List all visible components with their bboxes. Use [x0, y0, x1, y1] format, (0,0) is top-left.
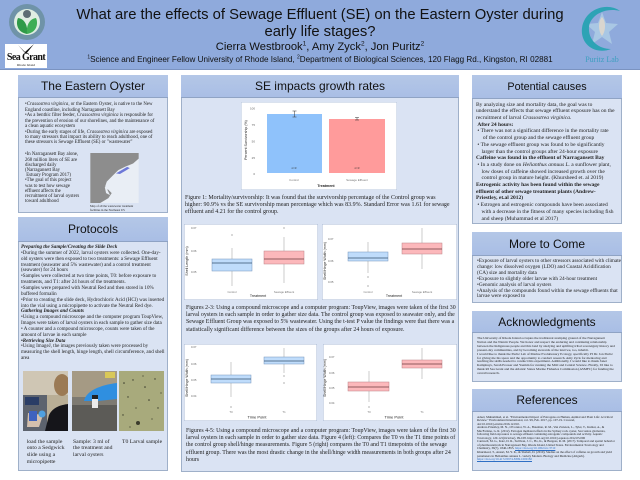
text block: oyster background: a clean aquatic ecosystem	[25, 124, 75, 129]
text block: references: Khursheed, T., Ansari, M. Y. K., & Shahab, D. (2019). Studies on the effect of caffeine on growth and yield	[477, 450, 612, 454]
text block: protocol steps: into the vial using a micropipette to activate the Neutral Red dye.	[21, 303, 153, 309]
caption: figure 1	[185, 194, 450, 214]
caption: figures 2-3: statistically significant difference between the sizes of the groups after 24 hours of exposure.	[186, 327, 404, 333]
text block: acknowledgments: for giving me his space and the opportunity to conduct research. Amy Zyck for mentoring and	[477, 356, 606, 360]
box plot: control group T0 vs T1: Time Point	[248, 414, 267, 420]
box plot: shell hinge width by treatment	[322, 224, 457, 300]
text block: references: doi:10.1016/j.envint.2016.12.010.	[477, 422, 520, 426]
text block: protocol steps: area	[21, 355, 29, 361]
heading: Potential causes	[472, 75, 622, 99]
text block: protocol steps: •Using ImageJ, the images previously taken were processed by	[21, 343, 148, 349]
photo caption: sample	[73, 438, 112, 458]
text block: future work: change: low dissolved oxygen (LDO) and Coastal Acidification	[477, 264, 611, 270]
icon: Sea Grant logo: Rhode Island	[17, 63, 35, 67]
text block: references: of pharmaceuticals in Narragansett Bay, Rhode Island, United States. Environmental Toxicology and	[477, 443, 604, 447]
text block: oyster background: •Crassostrea virginica, or the Eastern Oyster, is native to the New	[25, 102, 152, 107]
text block: potential causes: and sheep (Muhammad et al 2017)	[482, 216, 558, 222]
text block: references: https://doi.org/10.4172/0974-8369.1000182	[477, 457, 532, 461]
heading: Acknowledgments	[472, 311, 622, 333]
caption: figures 4-5: effluent group. There was the most drastic change in the shell/hinge width measurements in both groups after 24	[186, 450, 451, 456]
caption: figures 4-5: Figures 4-5: Using a compound microscope and a computer program: ToupView, images were taken of the first 30	[186, 428, 456, 434]
text block: oyster background: the prevention of erosion of our shorelines, and the maintenance of	[25, 119, 154, 124]
text block: references: MacFarlane, G. R. (2012). Estrogen mediated effects in the Sydney rock oyster, Saccostrea glomerata,	[477, 429, 605, 433]
box plot: control group T0 vs T1: 0.06	[191, 362, 197, 366]
box plot: sewage effluent group T0 vs T1: 0.05	[329, 386, 335, 390]
box plot: shell length by treatment: 0.06	[191, 249, 197, 253]
text block: future work: (CA) size and mortality data	[477, 270, 537, 276]
map: wastewater treatment facilities	[90, 153, 139, 203]
caption: figures 2-3: Sewage Effluent Group was exposed to 5% wastewater. Using the t-test P value the findings were that there was a	[186, 319, 454, 325]
box plot: shell length by treatment: 0.07	[191, 226, 197, 230]
text block: protocol steps: buffered formalin	[21, 291, 57, 297]
icon: Sea Grant logo	[5, 44, 47, 68]
bar chart: percent survivorship: Sewage Effluent	[346, 178, 368, 182]
bar chart: percent survivorship: 0	[253, 172, 255, 176]
caption: figures 4-5: larval oysters in each sample in order to gather size data. Figure 4 (left): Compares the T0 vs the T1 time points of	[186, 435, 455, 441]
photo caption: T0 larval sample: T0 Larval sample	[122, 438, 162, 444]
text block: potential causes: Estrogenic activity has been found within the sewage	[476, 182, 600, 188]
text block: protocol steps: (seawater) for 24 hours	[21, 267, 68, 273]
box plot: shell length by treatment: Control	[227, 290, 237, 294]
text block: future work: •Analysis of the compounds found within the sewage effluents that	[477, 288, 618, 294]
box plot: shell hinge width by treatment: Control	[363, 290, 373, 294]
text block: potential causes: • The sewage effluent group was found to be significantly	[477, 142, 604, 148]
box plot: control group T0 vs T1: Shell/Hinge Width (mm)	[185, 359, 189, 397]
text block: potential causes: After 24 hours:	[477, 122, 513, 128]
text block: Narragansett Bay and goal: 268 million liters of SE are	[25, 158, 77, 163]
photo caption: sample: the treatment and	[73, 445, 112, 451]
text block: protocol steps: •Prior to creating the slide deck, Hydrochloric Acid (HCl) was inserted	[21, 297, 164, 303]
title: What are the effects of Sewage Effluent (SE) on the Eastern Oyster during	[76, 7, 564, 23]
map caption: Map of all the wastewater treatment	[90, 204, 133, 208]
affiliations: 1Science and Engineer Fellow University of Rhode Island, 2Department of Biological Sciences, 120 Flagg Rd., Kingston, RI 02881	[87, 54, 553, 64]
text block: references: following field exposures to sewage effluent containing estrogenic compounds and activity. Aquatic	[477, 432, 603, 436]
panel: The Eastern Oyster	[18, 75, 168, 213]
text block: Narragansett Bay and goal: effluent affects the	[25, 189, 61, 194]
text block: protocol steps	[21, 244, 165, 361]
bar chart: percent survivorship: Percent Survivorship (%)	[244, 120, 248, 160]
text block: protocol steps: old oysters were then exposed to two treatments: a Sewage Effluent	[21, 256, 158, 262]
box plot: sewage effluent group T0 vs T1: 0.04	[329, 401, 335, 405]
title: early life stages?	[264, 24, 376, 40]
heading: Protocols: Protocols	[68, 222, 118, 236]
photo: loading the sample	[23, 371, 68, 431]
text block: Narragansett Bay and goal: recruitment of larval oysters	[25, 194, 79, 199]
photo caption: load the sample: load the sample	[27, 438, 62, 444]
box plot: control group T0 vs T1: T0	[229, 410, 233, 414]
caption: figures 2-3: Figures 2-3: Using a compound microscope and a computer program: ToupView, images were taken of the first 30	[186, 304, 456, 310]
text block: future work: larvae were exposed to	[477, 293, 525, 299]
text block: protocol steps: •Using a compound microscope and the computer program ToupView,	[21, 314, 163, 320]
icon: Puritz Lab logo	[582, 6, 620, 64]
icon: Sea Grant logo: Sea Grant	[7, 52, 45, 63]
caption: figures 4-5: the control group shell/hinge measurements. Figure 5 (right) compares the T0 and T1 timepoints of the sewage	[186, 442, 447, 448]
box plot: control group T0 vs T1: 0.07	[191, 345, 197, 349]
box plot: control group T0 vs T1: T1	[282, 410, 286, 414]
text block: protocol steps: • A counter and a compound microscope, counts were taken of the	[21, 326, 155, 332]
box plot: sewage effluent group T0 vs T1: Time Point	[385, 414, 404, 420]
caption: figures 2-3	[186, 304, 456, 333]
text block: Narragansett Bay and goal: •In Narragansett Bay alone,	[25, 152, 78, 157]
text block: potential causes: • Estrogen and estrogenic compounds have been associated	[477, 202, 608, 208]
bar chart: percent survivorship: n=3	[355, 166, 360, 170]
text block: oyster background: •As a benthic filter feeder, Crassostrea virginica is responsible for	[25, 113, 153, 118]
text block: protocol steps: Gathering Images and Counts	[21, 308, 84, 314]
bar chart: percent survivorship: n=3	[292, 166, 297, 170]
bar chart: percent survivorship: 50	[252, 140, 255, 144]
text block: potential causes: control group in mature height. (Khursheed et. al 2019)	[482, 175, 603, 181]
text block: potential causes: • In a study done on Helianthus annuus L. a sunflower plant,	[477, 162, 611, 168]
text block: acknowledgments: Nation and the Niantic People. We honor and respect the enduring and continuing relationship	[477, 340, 606, 344]
heading: Acknowledgments: Acknowledgments	[498, 315, 596, 329]
box plot: shell length by treatment: 0.05	[191, 270, 197, 274]
box plot: sewage effluent group T0 vs T1	[323, 344, 457, 421]
panel: Protocols	[18, 217, 168, 471]
box plot: shell hinge width by treatment: 0.07	[328, 237, 334, 241]
text block: Narragansett Bay and goal: was to test how sewage	[25, 184, 70, 189]
text block: protocol steps: Images were taken of larval oysters in each sample to gather size data	[21, 320, 162, 326]
icon: green program logo	[9, 4, 45, 40]
text block: protocol steps: measuring the shell length, hinge length, shell circumference, and shell	[21, 349, 165, 355]
text block: oyster background: •During the early stages of life, Crassostrea virginica are exposed	[25, 130, 152, 135]
text block: potential causes: with a decrease in the fitness of many species including fish	[482, 209, 613, 215]
text block: references: Adeel, Muhammad, et al. "Environmental Impact of Estrogens on Human, Animal and Plant Life: A Critical	[477, 414, 613, 418]
text block: potential causes: Priestley, et.al 2012)	[476, 195, 523, 201]
box plot: control group T0 vs T1	[184, 344, 317, 421]
heading: Protocols	[18, 217, 168, 242]
bar chart: percent survivorship: Treatment	[317, 184, 335, 188]
text block: potential causes: effluent of other sewage treatment plants (Andrew-	[476, 189, 596, 195]
caption: figure 1: Figure 1: Mortality/survivorship: It was found that the survivorship percentage of the Control group was	[185, 194, 436, 200]
heading: References	[472, 389, 622, 412]
text block: future work	[477, 258, 621, 299]
text block: references: Andrew-Priestley, M. N., O'Connor, W. A., Bateman, R. M., Van Zwieten, L., Tyler, T., Kumar, A., &	[477, 425, 604, 429]
text block: potential causes	[476, 102, 615, 222]
text block: potential causes: Caffeine was found in the effluent of Narragansett Bay	[476, 155, 604, 161]
text block: acknowledgments: teaching me skills needed to conduct this experiment. Additionally, I would like to thank Janet	[477, 359, 607, 363]
panel: More to Come	[472, 232, 622, 303]
panel: Acknowledgments	[472, 311, 622, 382]
text block: protocol steps: •Samples were prepared with Neutral Red and then stored in 10%	[21, 285, 154, 291]
text block: acknowledgments: overall research.	[477, 371, 500, 375]
text block: protocol steps: •Retrieving Size Data	[21, 338, 65, 344]
text block: protocol steps: amount of larvae in each sample	[21, 332, 86, 338]
text block: acknowledgments: present-day communities, and by becoming stewards of the land we, too, inhabit.	[477, 348, 589, 352]
text block: potential causes: understand the effects that sewage effluent exposure has on the	[476, 108, 615, 114]
box plot: shell hinge width by treatment: 0.06	[328, 259, 334, 263]
text block: potential causes: recruitment of larval Crassostrea virginica.	[476, 115, 571, 121]
authors: Cierra Westbrook1, Amy Zyck2, Jon Puritz2	[216, 40, 424, 53]
text block: oyster background: to many stressors that impact its ability to reach adulthood, one of	[25, 135, 152, 140]
heading: References: References	[516, 393, 578, 407]
text block: potential causes: low doses of caffeine showed increased growth over the	[482, 169, 605, 175]
text block: Narragansett Bay and goal	[25, 152, 80, 204]
text block: Narragansett Bay and goal: discharged daily	[25, 163, 56, 168]
title	[76, 7, 564, 40]
heading: SE impacts growth rates: SE impacts growth rates	[255, 79, 385, 93]
panel: SE impacts growth rates	[181, 75, 459, 472]
text block: protocol steps: Preparing the Sample/Creating the Slide Deck	[21, 244, 117, 250]
text block: future work: •Genomic analysis of larval oysters	[477, 282, 551, 288]
caption: figures 4-5: hours	[186, 457, 199, 463]
photo: sample vial	[72, 371, 117, 431]
text block: future work: •Exposure of larval oysters to other stressors associated with climate	[477, 258, 621, 264]
box plot: sewage effluent group T0 vs T1: T1	[420, 410, 424, 414]
box plot: shell length by treatment	[184, 224, 318, 300]
photo: T0 larval sample under microscope	[119, 371, 164, 431]
photo caption: load the sample: onto a Sedgwick	[27, 445, 65, 451]
text block: oyster background: England coastline, including Narragansett Bay	[25, 108, 115, 113]
text block: potential causes: larger than the control groups after 24-hour exposure	[482, 149, 598, 155]
box plot: sewage effluent group T0 vs T1: T0	[367, 410, 371, 414]
photo caption: sample: larval oysters	[73, 452, 103, 458]
text block: oyster background	[25, 102, 154, 145]
box plot: control group T0 vs T1: 0.04	[191, 394, 197, 398]
text block: potential causes: • There was not a significant difference in the mortality rate	[477, 128, 609, 134]
text block: protocol steps: treatments, and T1: after 24 hours of the treatments.	[21, 279, 126, 285]
text block: acknowledgments	[477, 336, 615, 375]
heading: SE impacts growth rates	[181, 75, 459, 98]
text block: Narragansett Bay and goal: (Narragansett Bay	[25, 168, 60, 173]
text block: Narragansett Bay and goal: •The goal of this project	[25, 178, 71, 183]
bar chart: percent survivorship: 25	[252, 156, 255, 160]
text block: protocol steps: •Samples were collected at two time points, T0: before exposure to	[21, 273, 156, 279]
text block: acknowledgments: I would like to thank the Puritz Lab of Marine Evolutionary Ecology, specifically PI Dr. Jon Puritz	[477, 352, 613, 356]
map caption	[90, 204, 134, 212]
bar chart: percent survivorship: 75	[252, 123, 255, 127]
heading: The Eastern Oyster: The Eastern Oyster	[41, 79, 145, 93]
box plot: shell length by treatment: Treatment	[250, 294, 266, 298]
map caption: facilities in the Northeast US	[90, 208, 125, 212]
text block: references	[477, 414, 615, 462]
header banner	[0, 0, 640, 70]
text block: references: Cantwell, M. G., Katz, D. R., Sullivan, J. C., Ho, K., & Burgess, R. M. (2017). Temporal and spatial behavior	[477, 439, 615, 443]
photo caption: load the sample: slide using a	[27, 452, 55, 458]
box plot: control group T0 vs T1: 0.05	[191, 378, 197, 382]
panel: Potential causes	[472, 75, 622, 224]
box plot: sewage effluent group T0 vs T1: Shell/Hinge Width (mm)	[323, 359, 327, 397]
text block: Narragansett Bay and goal: toward adulthood	[25, 199, 59, 204]
text block: acknowledgments: thank RI Sea Grant and the Atlantic States Marine Fisheries Commission (ASMFC) for funding the	[477, 367, 614, 371]
box plot: shell hinge width by treatment: Shell/Hinge Width (mm)	[323, 242, 327, 280]
text block: oyster background: these stressors is Sewage Effluent (SE) or "wastewater"	[25, 140, 132, 145]
box plot: shell hinge width by treatment: Treatment	[386, 294, 402, 298]
box plot: sewage effluent group T0 vs T1: 0.07	[329, 355, 335, 359]
box plot: shell hinge width by treatment: Sewage Effluent	[412, 290, 432, 294]
text block: references: Review." Environment International, vol. 99, Feb. 2017, pp. 107-19. Crossref,	[477, 418, 575, 422]
caption: figures 2-3: larval oysters in each sample in order to gather size data. The control group was exposed to seawater only, and the	[186, 312, 455, 318]
text block: potential causes: By analyzing size and mortality data, the goal was to	[476, 102, 592, 108]
box plot: shell length by treatment: Sewage Effluent	[274, 290, 294, 294]
text block: protocol steps: •During the summer of 2022, larval oysters were collected. One-day-	[21, 250, 161, 256]
text block: future work: •Exposure to slightly older larvae with 24-hour treatment	[477, 276, 597, 282]
heading: More to Come	[472, 232, 622, 256]
text block: acknowledgments: between the Indigenous people and this land by studying and uplifting tribal sovereignty history and	[477, 344, 615, 348]
text block: protocol steps: treatment (seawater and 5% wastewater) and a control treatment	[21, 262, 151, 268]
caption: figures 4-5	[186, 428, 456, 463]
text block: potential causes: of the control group and the sewage effluent group	[483, 135, 594, 141]
heading: The Eastern Oyster	[18, 75, 168, 98]
bar chart: percent survivorship: Control	[289, 178, 299, 182]
icon: Puritz Lab logo: Puritz Lab	[585, 55, 619, 64]
heading: Potential causes: Potential causes	[507, 81, 587, 93]
photo caption: load the sample: micropipette	[27, 459, 55, 465]
text block: references: Chemistry, 36(7), 1846-1855. https://doi.org/10.1002/etc.3710	[477, 446, 555, 450]
text block: acknowledgments: Kamphuys, Sarah Prosser and Yaamin for running the MiO and Central Science. Finally, I'd like to	[477, 363, 613, 367]
heading: More to Come: More to Come	[509, 237, 585, 251]
box plot: shell length by treatment: Shell Length (mm)	[185, 246, 189, 276]
text block: acknowledgments: The University of Rhode Island occupies the traditional stomping ground of the Narragansett	[477, 336, 605, 340]
photo caption: load the sample	[26, 438, 65, 465]
text block: references: parameters in Helianthus annuus L. variety Modern. Biology and Medicine (Aligarh).	[477, 454, 585, 458]
box plot: shell hinge width by treatment: 0.05	[328, 280, 334, 284]
box plot: sewage effluent group T0 vs T1: 0.06	[329, 371, 335, 375]
photo caption: sample: Sample: 3 ml of	[73, 438, 110, 444]
bar chart: percent survivorship: 100	[250, 106, 255, 110]
bar chart: percent survivorship	[241, 102, 397, 190]
caption: figure 1: higher: 90.9% vs the SE survivorship mean percentage which was 83.9%. Standard Error was 1.61 for sewage	[185, 202, 450, 208]
panel: References	[472, 389, 622, 471]
text block: references: Toxicology, 120-121(October), 99-108. https://doi.org/10.1016/j.aquatox.2012.05.006	[477, 436, 585, 440]
text block: Narragansett Bay and goal: Estuary Program 2017)	[26, 173, 71, 178]
caption: figure 1: effluent and 4.21 for the control group.	[185, 208, 279, 214]
